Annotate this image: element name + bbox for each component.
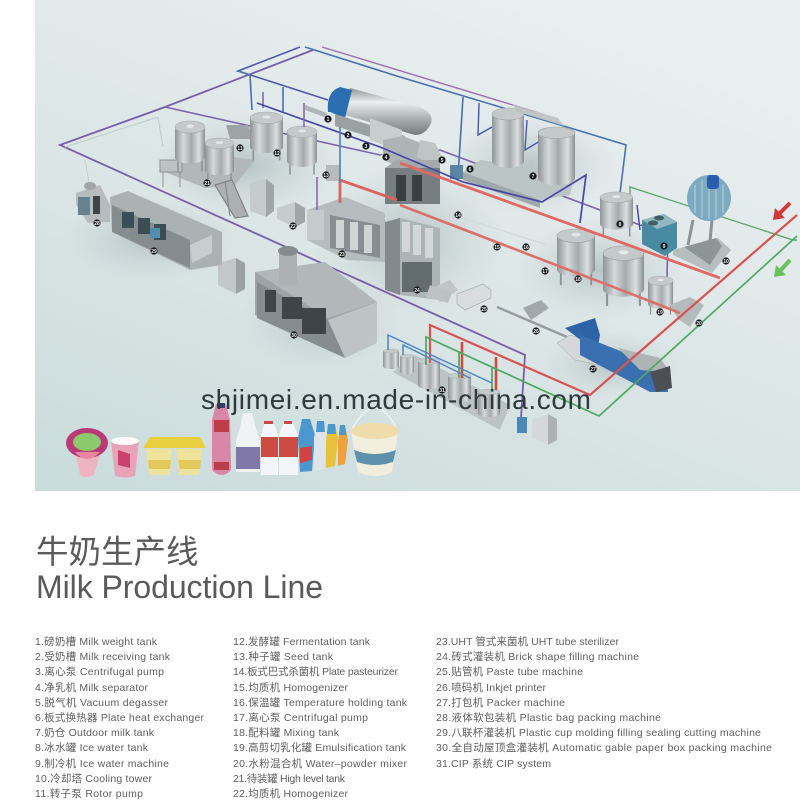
step number badges [93, 115, 730, 394]
watermark: shjimei.en.made-in-china.com [201, 384, 591, 415]
equipment list: column 1: 1.磅奶槽 Milk weight tank [35, 635, 158, 648]
step number badges: 15 [494, 245, 500, 251]
equipment list: column 1: 8.冰水罐 Ice water tank [35, 741, 149, 754]
equipment list: column 2: 22.均质机 Homogenizer [233, 787, 348, 800]
product: yogurt bucket [351, 408, 399, 476]
step number badges: 20 [696, 321, 702, 327]
plate pasteurizer and piping module [385, 160, 440, 204]
cooling tower [673, 175, 731, 273]
equipment list: column 2: 12.发酵罐 Fermentation tank [233, 635, 371, 648]
equipment list: column 1: 5.脱气机 Vacuum degasser [35, 696, 168, 709]
step number badges: 7 [532, 174, 535, 180]
pipes: purple and blue overhead lines [60, 47, 797, 418]
storage silos on base platform [463, 104, 575, 208]
tank group: seed tanks and platform [160, 121, 255, 218]
equipment list: column 3: 26.喷码机 Inkjet printer [436, 681, 546, 694]
small electrical cabinets [218, 179, 557, 445]
pipes: red and green service lines [257, 103, 797, 416]
panel: factory floor background [35, 0, 800, 491]
equipment list: column 2 [233, 635, 408, 800]
plastic bag packing machine [76, 182, 110, 223]
step number badges: 23 [339, 252, 345, 258]
arrow: green outflow [774, 260, 790, 277]
equipment list: column 1: 11.转子泵 Rotor pump [35, 787, 143, 800]
equipment list: column 2: 15.均质机 Homogenizer [233, 681, 348, 694]
step number badges: 26 [533, 329, 539, 335]
step number badges: 14 [455, 213, 461, 219]
step number badges: 28 [94, 221, 100, 227]
UHT sterilizer [307, 197, 385, 262]
packer machine [557, 318, 672, 392]
gable paper box packing machine [255, 246, 377, 358]
floor shadows [60, 113, 685, 399]
step number badges: 1 [327, 117, 330, 123]
product: twin milk bottles [261, 421, 298, 475]
heading: Chinese title: 牛奶生产线 [36, 534, 199, 570]
equipment list: column 1 [35, 635, 204, 800]
step number badges: 27 [590, 367, 596, 373]
equipment list: column 1: 3.离心泵 Centrifugal pump [35, 665, 164, 678]
equipment list: column 3: 28.液体软包装机 Plastic bag packing machine [436, 711, 661, 724]
equipment list: column 3 [436, 635, 772, 770]
step number badges: 10 [723, 259, 729, 265]
product samples row [66, 403, 399, 478]
equipment list: column 3: 24.砖式灌装机 Brick shape filling machine [436, 650, 639, 663]
equipment list: column 3: 23.UHT 管式来菌机 UHT tube sterilizer [436, 635, 620, 648]
step number badges: 5 [441, 158, 444, 164]
step number badges: 11 [237, 146, 243, 152]
product: yogurt cup [111, 437, 139, 478]
step number badges: 13 [323, 173, 329, 179]
product: four flavored bottles [298, 419, 348, 472]
heading: English title: Milk Production Line [36, 569, 323, 605]
arrow: red inflow [773, 203, 790, 220]
equipment list: column 1: 4.净乳机 Milk separator [35, 681, 148, 694]
equipment list: column 2: 17.离心泵 Centrifugal pump [233, 711, 368, 724]
CIP system tanks and platform [383, 349, 527, 433]
tank group: fermentation tanks [250, 105, 327, 174]
product: jelly cup [66, 428, 108, 477]
step number badges: 3 [365, 144, 368, 150]
step number badges: 30 [291, 333, 297, 339]
equipment list: column 2: 19.高剪切乳化罐 Emulsification tank [233, 741, 407, 754]
process line diagram [60, 47, 797, 445]
step number badges: 25 [481, 307, 487, 313]
receiving and separator equipment [326, 136, 463, 181]
ice water machine [642, 214, 677, 256]
equipment list: column 2: 21.待装罐 High level tank [233, 772, 346, 785]
equipment list: column 2: 20.水粉混合机 Water–powder mixer [233, 757, 408, 770]
product: twin yogurt pack [143, 437, 206, 475]
product: white milk bottle [236, 413, 260, 472]
equipment list: column 3: 29.八联杯灌装机 Plastic cup molding filling sealing cutting machine [436, 726, 761, 739]
equipment list: column 1: 7.奶仓 Outdoor milk tank [35, 726, 155, 739]
step number badges: 31 [439, 388, 445, 394]
equipment list: column 3: 30.全自动屋顶盒灌装机 Automatic gable paper box packing machine [436, 741, 772, 754]
equipment list: column 2: 13.种子罐 Seed tank [233, 650, 334, 663]
step number badges: 2 [347, 133, 350, 139]
equipment list: column 3: 25.贴管机 Paste tube machine [436, 665, 583, 678]
step number badges: 24 [414, 288, 420, 294]
step number badges: 8 [619, 222, 622, 228]
step number badges: 4 [385, 155, 388, 161]
step number badges: 21 [204, 181, 210, 187]
equipment list: column 3: 31.CIP 系统 CIP system [436, 757, 551, 770]
paste tube machine and conveyor [426, 284, 567, 337]
step number badges: 12 [274, 151, 280, 157]
equipment list: column 1: 9.制冷机 Ice water machine [35, 757, 169, 770]
step number badges: 6 [469, 167, 472, 173]
equipment list: column 1: 6.板式换热器 Plate heat exchanger [35, 711, 204, 724]
step number badges: 22 [290, 224, 296, 230]
step number badges: 19 [657, 310, 663, 316]
equipment list: column 2: 18.配料罐 Mixing tank [233, 726, 340, 739]
milk tanker truck [328, 87, 432, 152]
step number badges: 17 [542, 269, 548, 275]
step number badges: 9 [663, 244, 666, 250]
plastic cup filling machine [110, 191, 222, 270]
product: strawberry milk bottle [212, 403, 231, 475]
right side tank group [557, 192, 704, 327]
brick shape filling machine [385, 218, 458, 302]
equipment list: column 1: 2.受奶槽 Milk receiving tank [35, 651, 171, 663]
step number badges: 29 [151, 249, 157, 255]
equipment list: column 1: 10.冷却塔 Cooling tower [35, 772, 152, 785]
equipment list: column 3: 27.打包机 Packer machine [436, 696, 565, 709]
step number badges: 18 [575, 277, 581, 283]
equipment list: column 2: 14.板式巴式杀菌机 Plate pasteurizer [233, 665, 398, 678]
step number badges: 16 [523, 245, 529, 251]
equipment list: column 2: 16.保温罐 Temperature holding tank [233, 696, 408, 709]
